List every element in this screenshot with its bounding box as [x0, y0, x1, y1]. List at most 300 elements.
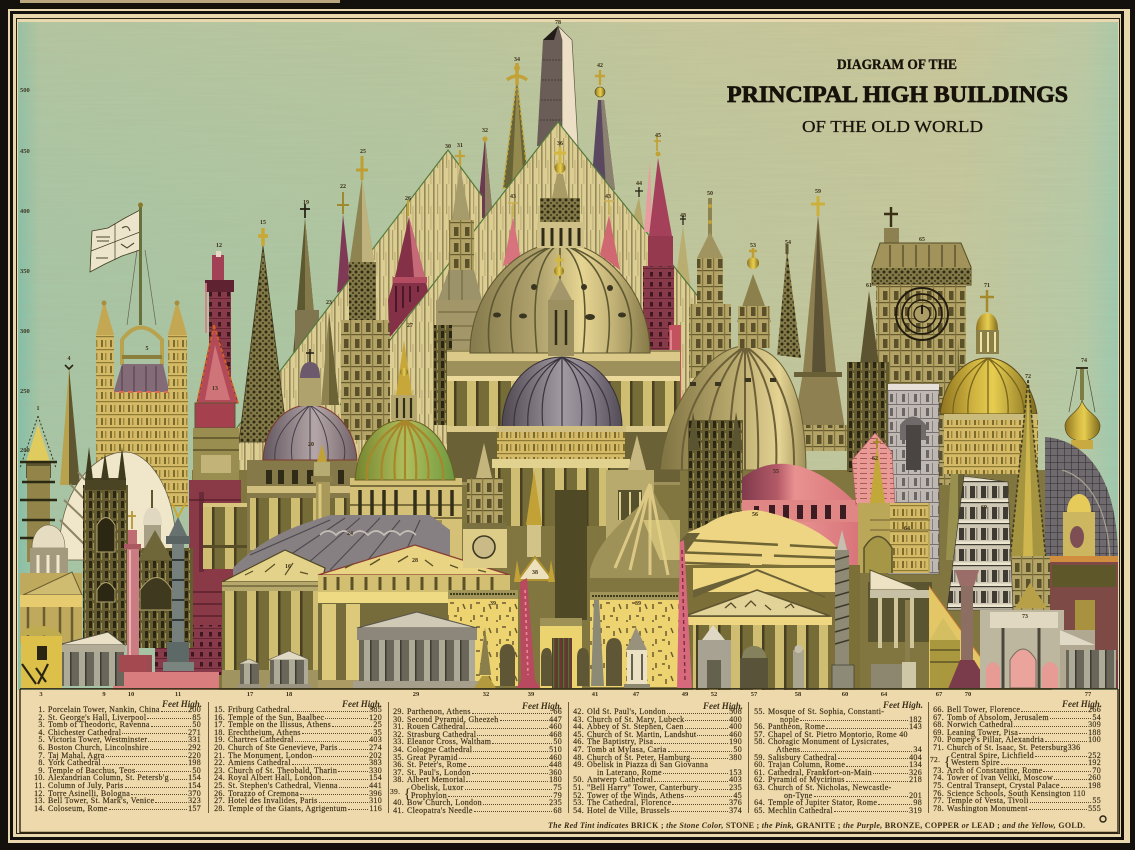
legend column 1: 50 [192, 766, 201, 775]
legend column 6: 309 [1088, 720, 1101, 729]
legend column 2: The Monument, London [228, 751, 312, 760]
legend column 1: Tomb of Theodoric, Ravenna [48, 720, 150, 729]
Feet High column headers: Feet High. [1062, 699, 1102, 709]
legend column 6: 66. [933, 705, 944, 714]
Taj Mahal [60, 452, 175, 560]
legend column 1: York Cathedral [48, 758, 101, 767]
legend column 3: 33. [393, 737, 404, 746]
colour key note: The Red Tint indicates BRICK ; the Stone Color, STONE ; the Pink, GRANITE ; the Purple, BRONZE, COPPER or LEAD ; and the Yellow, GOLD. [548, 821, 1085, 830]
legend column 3: 75 [553, 783, 562, 792]
building numbers on the skyline: 48 [680, 213, 686, 219]
Tomb 67 [930, 618, 960, 688]
legend column 1: 9. [38, 766, 45, 775]
legend column 6: Bell Tower, Florence [947, 705, 1020, 714]
spire 4 Chichester [60, 365, 80, 485]
legend column 2: 17. [214, 720, 225, 729]
legend column 4: Antwerp Cathedral [587, 775, 653, 784]
legend column 5: 60. [754, 760, 765, 769]
legend column 6: 336 [1068, 743, 1080, 752]
Arch pink wing [1066, 650, 1116, 688]
legend column 3: Eleanor Cross, Waltham [407, 737, 491, 746]
legend column 4: 400 [729, 715, 742, 724]
legend column 6: 73. [933, 766, 944, 775]
legend column 5: 201 [909, 791, 922, 800]
legend column 4: 49. [573, 760, 584, 769]
building numbers on the skyline: 78 [555, 20, 561, 26]
building numbers along the base: 57 [751, 691, 758, 698]
spire 59 Salisbury Cathedral [790, 196, 848, 451]
ground line [20, 688, 1118, 690]
spire 48 Hamburg [675, 216, 691, 292]
legend column 4: 52. [573, 791, 584, 800]
Tomb of Theodoric 3 [21, 626, 62, 688]
legend column 3: 39. [390, 787, 400, 796]
legend column 4: in Laterano, Rome [597, 768, 662, 777]
legend column 5: on-Tyne [784, 791, 813, 800]
legend column 6: Arch of Constantine, Rome [947, 766, 1042, 775]
legend column 5: Athens [776, 745, 800, 754]
Pompey's Pillar 70 [948, 570, 992, 689]
legend column 5: Mosque of St. Sophia, Constanti- [768, 707, 884, 716]
legend column 4: 47. [573, 745, 584, 754]
legend column 6: 555 [1088, 804, 1101, 813]
Pyramid of Mycerinus [852, 433, 895, 505]
legend column 4: 380 [729, 753, 742, 762]
dome 27 Hotel des Invalides [355, 340, 455, 480]
legend column 4: 44. [573, 722, 584, 731]
building numbers on the skyline: 53 [750, 243, 756, 249]
legend column 2: Royal Albert Hall, London [228, 773, 321, 782]
St Peter's building mass [192, 350, 1052, 690]
Obelisk 39 Luxor [516, 578, 541, 689]
legend column 4: 235 [729, 783, 742, 792]
legend column 2: 274 [369, 743, 382, 752]
legend column 6: 70 [1092, 766, 1101, 775]
central gate [540, 618, 582, 688]
legend column 4: Tower of the Winds, Athens [587, 791, 684, 800]
legend column 2: Temple on the Ilissus, Athens [228, 720, 331, 729]
legend column 1: 323 [188, 796, 201, 805]
legend column 5 [754, 707, 922, 815]
legend column 1: 10. [34, 773, 45, 782]
building numbers on the skyline: 31 [457, 143, 463, 149]
legend column 3: 68 [553, 806, 562, 815]
flag [90, 210, 140, 272]
legend column 5: 59. [754, 753, 765, 762]
spire 44 Caen [632, 187, 644, 230]
flagstaff [127, 202, 156, 325]
legend column 1: 154 [188, 773, 201, 782]
legend column 6: Tomb of Absolom, Jerusalem [947, 713, 1049, 722]
legend column 1: Bell Tower, St. Mark's, Venice [48, 796, 154, 805]
legend column 1 [34, 705, 201, 813]
legend column 5: Church of St. Nicholas, Newcastle- [768, 783, 892, 792]
title block: PRINCIPAL HIGH BUILDINGS [727, 82, 1068, 107]
legend column 5: Choragic Monument of Lysicrates, [768, 737, 889, 746]
Crystal Palace [1045, 437, 1118, 560]
tower 65 Mechlin Cathedral [872, 207, 971, 485]
legend column 2: 19. [214, 735, 225, 744]
height scale: 400 [20, 208, 30, 215]
building numbers along the base: 3 [39, 691, 43, 698]
Temple of the Sun 16 [222, 550, 325, 688]
legend column 1: 50 [192, 720, 201, 729]
legend column 3: 38. [393, 775, 404, 784]
Baptistry 46 [590, 484, 680, 578]
tower 50 side: gothic block [688, 412, 743, 530]
legend column 1: Column of July, Paris [48, 781, 124, 790]
building numbers along the base: 39 [528, 691, 535, 698]
legend column 4 [573, 707, 742, 815]
dome 55 Mosque of St Sophia [742, 464, 860, 600]
height scale: 450 [20, 148, 30, 155]
legend column 2: Chartres Cathedral [228, 735, 294, 744]
legend column 1: 6. [38, 743, 45, 752]
legend column 6: 72. [930, 755, 940, 764]
legend column 2: 15. [214, 705, 225, 714]
building numbers on the skyline: 23 [326, 300, 332, 306]
building numbers on the skyline: 16 [285, 564, 291, 570]
legend column 6: 260 [1088, 773, 1101, 782]
building numbers on the skyline: 5 [146, 346, 148, 352]
legend column 6: 192 [1088, 758, 1101, 767]
legend column 5: 34 [913, 745, 922, 754]
legend column 2: Church of Ste Genevieve, Paris [228, 743, 338, 752]
spire 42 Old St Paul's [591, 70, 615, 190]
legend column 6: Central Transept, Crystal Palace [947, 781, 1060, 790]
lantern [537, 147, 584, 248]
central spire 72 left [946, 340, 970, 560]
building numbers on the skyline: 43 [605, 194, 611, 200]
building numbers on the skyline: 39 [490, 601, 496, 607]
building numbers on the skyline: 36 [557, 141, 563, 147]
Feet High column headers: Feet High. [342, 699, 382, 709]
legend column 3: Obelisk, Luxor [411, 783, 464, 792]
legend column 5: 56. [754, 722, 765, 731]
legend column 6: 188 [1088, 728, 1101, 737]
legend column 1: 1. [38, 705, 45, 714]
drum of dome 20 [247, 460, 357, 560]
legend column 1: Chichester Cathedral [48, 728, 121, 737]
legend column 2: Erechtheium, Athens [228, 728, 301, 737]
height scale: 350 [20, 268, 30, 275]
legend column 2: 385 [369, 705, 382, 714]
legend column 1: 3. [38, 720, 45, 729]
building numbers on the skyline: 44 [636, 181, 642, 187]
legend column 3: 360 [549, 768, 562, 777]
legend column 6: 198 [1088, 781, 1101, 790]
Albert Memorial 38 [514, 470, 555, 582]
Temple on Ilissus 17 [238, 659, 261, 689]
legend column 2: 27. [214, 796, 225, 805]
legend column 4: The Baptistry, Pisa [587, 737, 653, 746]
Alexandrian Column 10 [119, 511, 146, 672]
legend column 6: 266 [1088, 705, 1101, 714]
building numbers on the skyline: 22 [340, 184, 346, 190]
Feet High column headers: Feet High. [703, 701, 743, 711]
legend column 2 [214, 705, 382, 814]
title block: OF THE OLD WORLD [802, 117, 983, 136]
Temple of Bacchus 9 [58, 632, 125, 686]
Tomb at Mylasa 47 [624, 627, 650, 688]
legend column 3: 35. [393, 753, 404, 762]
legend column 6: 100 [1088, 735, 1101, 744]
Porcelain Tower 1 [20, 416, 57, 562]
Colosseum 14 [203, 503, 250, 569]
building numbers on the skyline: 15 [260, 220, 266, 226]
legend column 4: 50. [573, 775, 584, 784]
building numbers on the skyline: 56 [752, 512, 758, 518]
building numbers on the skyline: 43 [510, 194, 516, 200]
legend column 3: Cologne Cathedral [407, 745, 472, 754]
Temple of Jupiter Stator 64 [868, 570, 932, 689]
legend column 3: 41. [393, 806, 404, 815]
legend column 3: 30. [393, 715, 404, 724]
building numbers along the base: 64 [881, 691, 888, 698]
dome 20 Church of Ste Genevieve [263, 349, 357, 460]
legend column 3: 66 [553, 707, 562, 716]
tower 50 Antwerp Cathedral [689, 198, 731, 378]
Feet High column headers: Feet High. [522, 701, 562, 711]
legend column 2: 16. [214, 713, 225, 722]
building numbers on the skyline: 72 [1025, 374, 1031, 380]
legend column 5: 134 [909, 760, 922, 769]
spire 34 Cologne [503, 63, 529, 188]
dome 56 Pantheon [650, 510, 860, 690]
legend column 2: 396 [369, 789, 382, 798]
legend panel background [20, 689, 1118, 832]
legend column 1: Victoria Tower, Westminster [48, 735, 147, 744]
legend column 2: Amiens Cathedral [228, 758, 291, 767]
Obelisk 49 [677, 540, 692, 689]
legend column 3: 50 [553, 737, 562, 746]
tower 13 Bell Tower [193, 325, 239, 480]
legend column 1: 7. [38, 751, 45, 760]
Pantheon portico [685, 568, 835, 690]
legend column 2: Temple of the Giants, Agrigentum [228, 804, 347, 813]
tower 45 Landshut [643, 136, 681, 490]
building numbers along the base: 47 [633, 691, 640, 698]
legend column 3: Strasburg Cathedral [407, 730, 476, 739]
legend column 5: 57. [754, 730, 765, 739]
legend column 1: 157 [188, 804, 201, 813]
Egyptian pylon right [590, 592, 680, 687]
building numbers on the skyline: 30 [445, 144, 451, 150]
legend column 3: 29. [393, 707, 404, 716]
legend column 6: Washington Monument [947, 804, 1028, 813]
legend column 3 [390, 707, 562, 816]
legend column 2: Friburg Cathedral [228, 705, 290, 714]
legend column 3: Great Pyramid [407, 753, 458, 762]
legend column 1: 12. [34, 789, 45, 798]
legend column 2: Hotel des Invalides, Paris [228, 796, 318, 805]
legend column 6: 78. [933, 804, 944, 813]
legend column 1: Boston Church, Lincolnshire [48, 743, 149, 752]
legend column 4: 45. [573, 730, 584, 739]
tower 12 Torre Asinelli [205, 251, 234, 407]
legend column 6: 77. [933, 796, 944, 805]
lantern 37 St Paul's [548, 255, 574, 356]
tower 66 Giotto Bell Tower [888, 384, 939, 574]
clock face [473, 536, 495, 558]
building numbers on the skyline: 65 [919, 237, 925, 243]
legend column 1: Torre Asinelli, Bologna [48, 789, 130, 798]
legend column 1: 2. [38, 713, 45, 722]
legend column 4: Hotel de Ville, Brussels [587, 806, 670, 815]
legend column 4: 51. [573, 783, 584, 792]
legend column 3: 34. [393, 745, 404, 754]
legend column 4: The Cathedral, Florence [587, 798, 671, 807]
legend column 1: 370 [188, 789, 201, 798]
legend column 3: Albert Memorial [407, 775, 465, 784]
Bow Church 40 [463, 443, 507, 568]
legend column 3: 468 [549, 730, 562, 739]
building numbers along the base: 32 [483, 691, 489, 698]
building numbers on the skyline: 20 [308, 442, 314, 448]
legend column 2: 403 [369, 735, 382, 744]
height scale [20, 87, 30, 454]
legend column 4: 54. [573, 806, 584, 815]
lantern [737, 248, 771, 348]
legend column 3: 180 [549, 775, 562, 784]
legend column 3: Bow Church, London [407, 798, 482, 807]
building numbers on the skyline: 74 [1081, 358, 1087, 364]
building numbers on the skyline: 19 [303, 200, 309, 206]
Egyptian pylon left [448, 590, 518, 686]
legend column 4: 508 [729, 707, 742, 716]
building numbers along the base: 11 [175, 691, 181, 698]
legend column 1: 220 [188, 751, 201, 760]
dome 53 Florence Cathedral [660, 248, 806, 470]
building numbers on the skyline: 42 [597, 63, 603, 69]
red brick tower 2 St George's Hall [155, 480, 243, 675]
building numbers along the base: 10 [128, 691, 134, 698]
legend column 5: 319 [909, 806, 922, 815]
Column of July 11 [163, 502, 194, 671]
legend column 6: 55 [1092, 796, 1101, 805]
Trajan Column 60 [832, 530, 854, 689]
St Paul's front & towers [555, 435, 654, 620]
column base red [113, 655, 219, 690]
legend column 5: 218 [909, 775, 922, 784]
building numbers on the skyline: 4 [68, 356, 70, 362]
legend column 4: 45 [733, 791, 742, 800]
legend column 2: 120 [369, 713, 382, 722]
legend column 5: 404 [909, 753, 922, 762]
legend column 3: 31. [393, 722, 404, 731]
legend column 5: 40 [899, 730, 908, 739]
building numbers on the skyline: 61 [866, 283, 872, 289]
legend column 3: 37. [393, 768, 404, 777]
building numbers along the base: 58 [795, 691, 802, 698]
Tower of the Winds 52 [698, 625, 731, 688]
building numbers on the skyline: 59 [815, 189, 821, 195]
legend column 1: 292 [188, 743, 201, 752]
legend column 1: 271 [188, 728, 201, 737]
legend column 6: Temple of Vesta, Tivoli [947, 796, 1029, 805]
legend column 3: St. Paul's, London [407, 768, 471, 777]
legend column 5: Temple of Jupiter Stator, Rome [768, 798, 877, 807]
building numbers along the base: 67 [936, 691, 943, 698]
dome 37 St Paul's [492, 357, 630, 526]
legend column 6: 75. [933, 781, 944, 790]
building numbers along the base: 49 [682, 691, 689, 698]
dome 24 Royal Albert Hall [233, 515, 450, 585]
legend column 6: 252 [1088, 751, 1101, 760]
legend column 6: Science Schools, South Kensington [947, 789, 1071, 798]
legend column 2: 202 [369, 751, 382, 760]
legend column 2: 35 [373, 728, 382, 737]
spire 26 Torazzo of Cremona [388, 200, 428, 337]
legend column 4: Church of St. Mary, Lubeck [587, 715, 684, 724]
legend column 4: 50 [733, 745, 742, 754]
spire 15 Friburg [239, 228, 288, 442]
legend column 3: 32. [393, 730, 404, 739]
building numbers on the skyline: 38 [532, 570, 538, 576]
legend column 6: 110 [1073, 789, 1086, 798]
building numbers on the skyline: 45 [655, 133, 661, 139]
Chapel 57 [740, 646, 768, 688]
building numbers on the skyline: 64 [904, 526, 910, 532]
legend column 3: Prophylon [411, 791, 447, 800]
legend column 3: 460 [549, 753, 562, 762]
legend column 5: Pantheon, Rome [768, 722, 825, 731]
legend column 5: 55. [754, 707, 765, 716]
building numbers on the skyline: 13 [212, 386, 218, 392]
legend column 5: Cathedral, Frankfort-on-Main [768, 768, 872, 777]
Eleanor Cross 33 [474, 627, 496, 688]
gothic front [128, 530, 193, 648]
legend column 4: 460 [729, 730, 742, 739]
legend column 1: 8. [38, 758, 45, 767]
building numbers on the skyline: 25 [360, 149, 366, 155]
legend column 2: 383 [369, 758, 382, 767]
legend column 2: 28. [214, 804, 225, 813]
legend column 1: 5. [38, 735, 45, 744]
sky background [18, 22, 1118, 690]
statues [500, 638, 622, 686]
building numbers on the skyline: 27 [407, 323, 413, 329]
Second Pyramid [233, 150, 482, 520]
legend column 4: 400 [729, 722, 742, 731]
legend column 6: 76. [933, 789, 944, 798]
legend column 5: Mechlin Cathedral [768, 806, 833, 815]
legend column 2: 116 [369, 804, 382, 813]
legend column 2: 20. [214, 743, 225, 752]
building numbers along the base: 70 [965, 691, 971, 698]
building numbers on the skyline: 39 [635, 601, 641, 607]
legend column 2: Church of St. Theobald, Tharin [228, 766, 337, 775]
legend column 3: Second Pyramid, Gheezeh [407, 715, 499, 724]
building numbers along the base: 41 [592, 691, 598, 698]
building numbers along the base: 52 [711, 691, 717, 698]
legend column 2: Torazzo of Cremona [228, 789, 299, 798]
legend column 3: 36. [393, 760, 404, 769]
yellow temple left [20, 572, 82, 643]
Monument 21 [311, 444, 333, 564]
building numbers on the skyline: 69 [981, 505, 987, 511]
legend column 6: 74. [933, 773, 944, 782]
small dome and minaret [30, 490, 162, 580]
Feet High column headers: Feet High. [883, 700, 923, 710]
legend column 3: 235 [549, 798, 562, 807]
legend column 5: 326 [909, 768, 922, 777]
height scale: 200 [20, 447, 30, 454]
tower 61 Frankfort Cathedral [847, 291, 889, 472]
Cleopatra's Needle 41 [591, 600, 604, 686]
spire 72 Lichfield [1010, 380, 1050, 616]
drum of dome 27 [350, 478, 462, 563]
